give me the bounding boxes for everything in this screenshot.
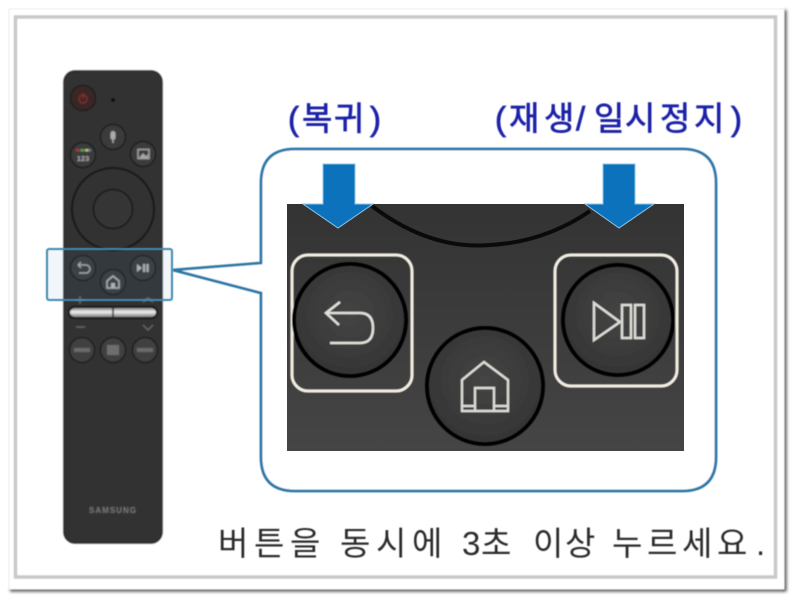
home button [100,270,126,294]
remote control [64,71,162,543]
microphone button [100,124,126,150]
ambient button [130,142,156,166]
navigation dial [72,168,154,250]
label: play pause: ( [495,100,506,137]
label: back: ( [288,100,299,137]
label: back: ) [370,100,381,137]
instruction text: . [756,525,765,562]
back button [70,256,96,280]
label: play pause: 일시정지 [594,100,724,137]
callout outline with pointer [173,149,716,491]
volume channel rocker [69,306,157,319]
label: back: 복귀 [302,100,364,137]
back button zoomed [292,255,412,391]
instruction text: 동시에 [340,525,442,562]
remote body [64,71,162,543]
arrow: back [303,164,373,228]
label: play pause: 재생 [509,100,574,137]
highlight box on remote [47,249,172,300]
arrow: play pause [585,164,654,228]
bottom buttons row [70,338,158,362]
label: play pause: / [576,100,586,137]
zoom callout panel [173,149,716,491]
dial edge curve [372,206,590,246]
instruction text: 이상 [533,525,595,562]
instruction text: 누르세요 [612,525,747,562]
power button [70,86,96,110]
play pause button [130,256,156,280]
dark zoomed remote panel [287,204,684,451]
instruction text: 3초 [462,525,511,562]
volume and channel markers [76,296,153,330]
samsung logo: SAMSUNG [89,506,137,515]
sensor dot [111,98,115,102]
color number button [70,142,96,168]
instruction text: 버튼을 [218,525,320,562]
label: play pause: ) [731,100,742,137]
play pause button zoomed [555,255,677,386]
home button zoomed [427,328,543,444]
color number button: 123 [77,154,89,163]
